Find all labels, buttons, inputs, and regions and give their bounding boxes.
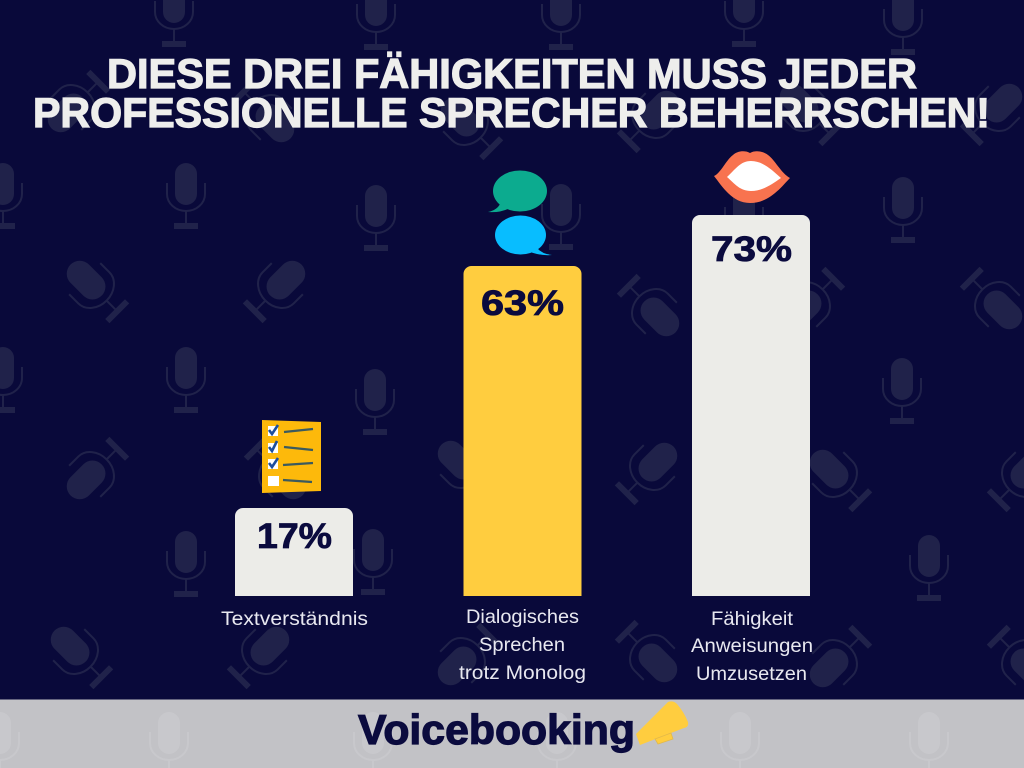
label: Fähigkeit Anweisungen Umzusetzen: Umzusetzen	[696, 663, 807, 685]
logo: Voicebooking: Voicebooking	[358, 706, 635, 753]
value 63%: 63%	[481, 284, 564, 323]
bar: Dialogisches Sprechen 63%	[464, 266, 582, 596]
footer band	[0, 700, 1024, 768]
label: Dialogisches Sprechen trotz Monolog	[459, 606, 586, 684]
bar: Textverständnis 17%	[235, 508, 353, 596]
value 73%: 73%	[711, 230, 792, 269]
footer microphone pattern	[0, 712, 948, 768]
label: Textverständnis: Textverständnis	[221, 608, 368, 630]
title: PROFESSIONELLE SPRECHER BEHERRSCHEN!	[33, 89, 990, 136]
icon: megaphone	[636, 701, 688, 745]
title: DIESE DREI FÄHIGKEITEN MUSS JEDER	[107, 50, 917, 97]
label: Fähigkeit Anweisungen Umzusetzen: Fähigkeit	[711, 608, 794, 630]
icon: checklist	[262, 420, 321, 493]
label: Dialogisches Sprechen trotz Monolog: Sprechen	[479, 634, 565, 656]
label: Dialogisches Sprechen trotz Monolog: trotz Monolog	[459, 662, 586, 684]
icon: lips	[714, 151, 790, 203]
bar: Fähigkeit Anweisungen 73%	[692, 215, 810, 596]
value 17%: 17%	[257, 517, 332, 556]
label: Fähigkeit Anweisungen Umzusetzen	[691, 608, 813, 685]
title	[33, 50, 990, 136]
label: Fähigkeit Anweisungen Umzusetzen: Anweisungen	[691, 635, 813, 657]
label: Dialogisches Sprechen trotz Monolog: Dialogisches	[466, 606, 579, 628]
icon: speech bubbles	[488, 170, 552, 255]
